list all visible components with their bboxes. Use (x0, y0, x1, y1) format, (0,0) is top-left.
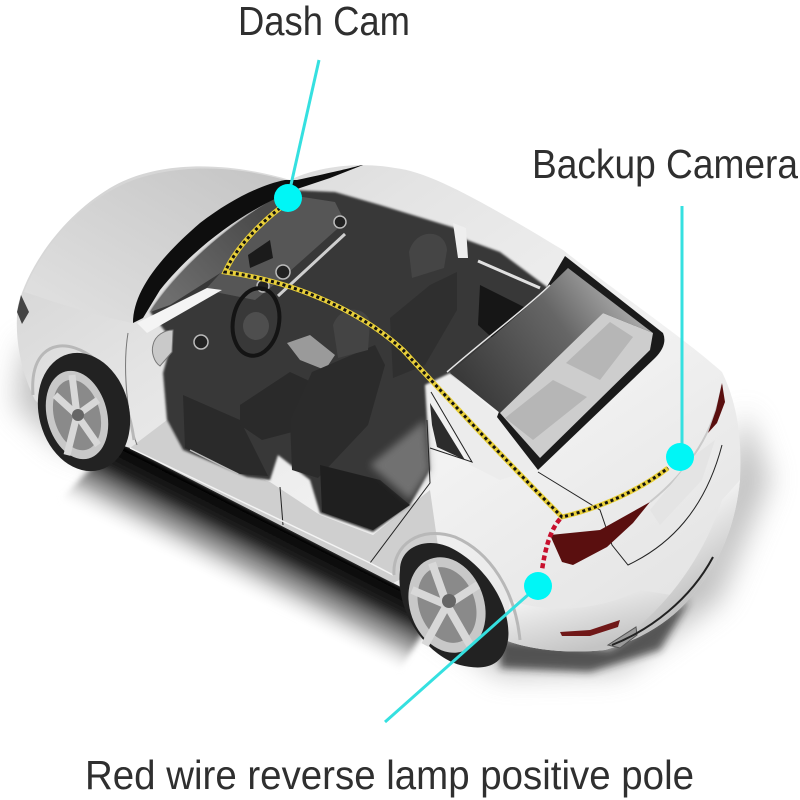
sill shadow (60, 440, 440, 670)
connector: dash cam (274, 60, 319, 212)
glass shelf panels (505, 322, 633, 440)
cabin dark area (150, 190, 560, 532)
exhaust pipes (608, 627, 637, 648)
driver seat (290, 310, 385, 478)
rear reflector (560, 620, 620, 636)
lower glass (500, 313, 653, 458)
tail light left (550, 502, 650, 565)
door and body lines (126, 333, 722, 565)
infotainment screen (248, 240, 273, 268)
front floor (183, 395, 268, 476)
connector: backup camera (666, 206, 694, 471)
window edge arc (447, 285, 550, 372)
tail light right (708, 383, 725, 433)
window frame (497, 256, 664, 470)
upper glass (450, 268, 653, 413)
rear side fade (432, 375, 538, 480)
wire: yellow black to backup camera (225, 208, 668, 517)
rear floor (320, 465, 410, 530)
rear wheel arch (394, 533, 520, 640)
rear window (447, 256, 664, 470)
connector: red wire (385, 572, 552, 722)
rear door handle region (370, 420, 430, 500)
rear bumper shading (605, 480, 740, 650)
hood (24, 169, 285, 323)
rear bumper shadow (500, 600, 690, 672)
side mirror (152, 330, 173, 366)
driver seat base (240, 372, 318, 440)
gear console (287, 335, 335, 370)
dashboard trim (278, 234, 345, 296)
rear door trim (478, 261, 540, 288)
front wheel (25, 342, 143, 482)
front door sill plate (190, 450, 238, 474)
windshield glass (150, 190, 290, 312)
air vents (194, 216, 346, 349)
wire: red (542, 519, 560, 570)
lower rear bumper shading (505, 590, 690, 652)
front wheel arch (33, 346, 134, 440)
passenger seat (390, 234, 457, 378)
ground shadow (15, 340, 770, 675)
cabin interior through the transparent body (137, 190, 560, 532)
rear badge strip (650, 440, 715, 525)
label: Red wire reverse lamp positive pole: Red wire reverse lamp positive pole (85, 752, 694, 798)
dashboard top (205, 195, 345, 300)
door pillar highlight (137, 288, 222, 333)
side sill band (130, 420, 440, 583)
rear wheel (395, 543, 508, 667)
rear quarter window (430, 403, 465, 460)
trunk lip line (650, 385, 722, 502)
car body (17, 165, 740, 652)
rear door panel (478, 285, 530, 345)
front pillar top (453, 223, 468, 258)
sill highlight (130, 448, 393, 575)
windshield frame (133, 165, 363, 323)
front headlight (17, 295, 29, 324)
bumper lower line (612, 557, 713, 645)
car illustration (15, 165, 770, 675)
steering wheel (227, 285, 285, 359)
